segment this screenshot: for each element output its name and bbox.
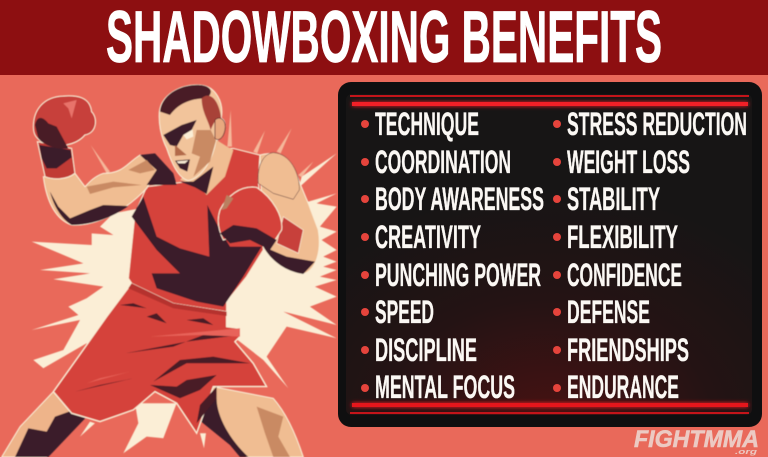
bullets right xyxy=(553,120,561,392)
torso shadow xyxy=(132,197,262,307)
benefits list left column: TECHNIQUE xyxy=(375,106,479,142)
left arm xyxy=(43,155,160,225)
shorts lighter fold xyxy=(87,328,240,383)
illustration: boxer with burst xyxy=(2,85,337,457)
benefits list left column: CREATIVITY xyxy=(375,219,481,255)
right arm shadow xyxy=(263,247,315,274)
benefits list left column: COORDINATION xyxy=(375,144,511,180)
nose shade xyxy=(175,145,187,156)
bottom neon lines xyxy=(350,403,749,414)
back leg shadow xyxy=(15,408,88,457)
head xyxy=(159,85,225,181)
left cuff xyxy=(37,142,75,179)
benefits list left column xyxy=(361,106,544,405)
benefits list right column xyxy=(553,106,747,405)
right glove shadow xyxy=(220,225,277,250)
benefits list left column: BODY AWARENESS xyxy=(375,181,544,217)
panel inner xyxy=(346,94,752,415)
left glove xyxy=(33,96,96,146)
front leg shadow xyxy=(195,398,248,457)
torso xyxy=(128,148,263,312)
ear xyxy=(215,118,225,140)
front leg xyxy=(193,387,303,457)
benefits list right column: DEFENSE xyxy=(567,294,650,330)
waistband xyxy=(128,283,227,316)
right glove xyxy=(218,187,282,240)
neck xyxy=(180,140,233,195)
burst lower xyxy=(80,403,206,453)
benefits list left column: PUNCHING POWER xyxy=(375,257,541,293)
logo: FIGHTMMA.org: FIGHTMMA xyxy=(634,426,759,453)
bullets left xyxy=(361,120,369,392)
neck shadow xyxy=(180,167,213,194)
benefits list left column: MENTAL FOCUS xyxy=(375,369,515,405)
benefits list right column: FLEXIBILITY xyxy=(567,219,678,255)
mouth xyxy=(175,159,190,172)
top neon lines xyxy=(350,95,749,106)
left arm shadow xyxy=(50,153,177,225)
back leg xyxy=(2,392,88,457)
left glove shadow xyxy=(35,118,68,149)
benefits list right column: ENDURANCE xyxy=(567,369,679,405)
upper rays xyxy=(91,110,313,177)
shorts shadows xyxy=(75,303,250,423)
shorts xyxy=(53,283,267,433)
right cuff xyxy=(277,217,303,253)
hair xyxy=(160,85,211,115)
panel frame xyxy=(338,82,762,427)
benefits panel xyxy=(338,82,762,427)
title banner xyxy=(0,0,768,78)
benefits list left column: SPEED xyxy=(375,294,434,330)
benefits list left column: DISCIPLINE xyxy=(375,332,477,368)
right arm xyxy=(260,154,319,274)
logo: FIGHTMMA.org: .org xyxy=(735,449,758,456)
brow and eye socket xyxy=(163,120,197,147)
eye xyxy=(183,129,193,139)
face shade xyxy=(192,130,216,177)
benefits list right column: STABILITY xyxy=(567,181,660,217)
burst behind boxer xyxy=(32,153,337,388)
shoulder xyxy=(258,153,299,199)
face xyxy=(159,85,225,181)
